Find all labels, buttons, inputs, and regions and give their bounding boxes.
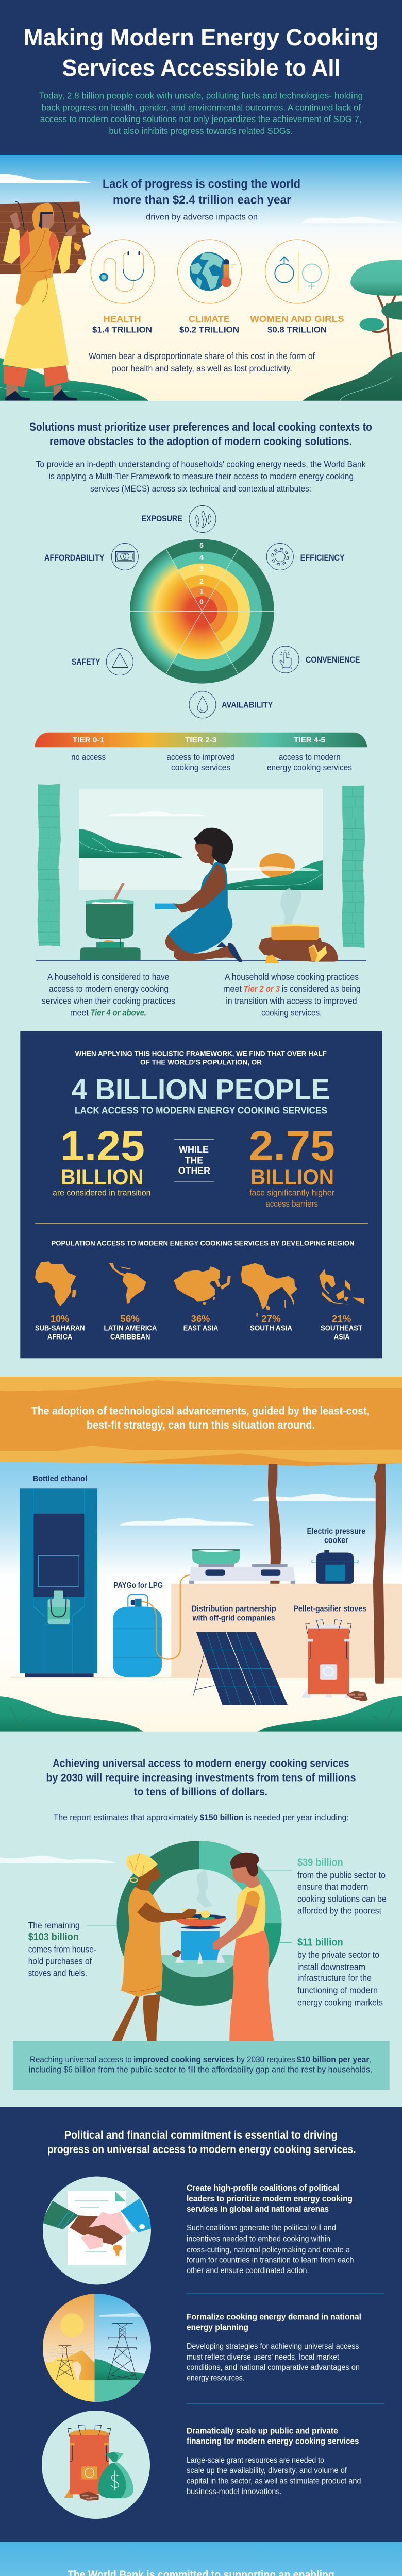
- text: coalitions: incentives needed to embed cooking within: [187, 2234, 330, 2243]
- connector lines: [261, 1870, 292, 1871]
- headline number: LACK ACCESS TO MODERN ENERGY COOKING SERVICES: [75, 1105, 327, 1116]
- text: tier 4 definition: services when their cooking practices: [42, 995, 175, 1006]
- tier scale bar: [35, 733, 367, 747]
- text: report estimate: is needed per year including:: [246, 1812, 349, 1822]
- title: Services Accessible to All: [62, 55, 341, 81]
- text: energy planning: Formalize cooking energy demand in national: [187, 2312, 361, 2321]
- text: report estimate: $150 billion: [200, 1812, 244, 1822]
- text: coalitions: cross-cutting, national policymaking and create a: [187, 2246, 350, 2255]
- tier numbers: 1: [199, 587, 204, 596]
- heading: by 2030 will require increasing investments from tens of millions: [46, 1771, 356, 1784]
- map: East Asia: [174, 1266, 231, 1305]
- heading: more than $2.4 trillion each year: [113, 193, 291, 206]
- illustration: pellet gasifier stove: [301, 1620, 368, 1701]
- heading: progress on universal access to modern energy cooking services.: [47, 2143, 356, 2156]
- text: coalitions: Such coalitions generate the political will and: [187, 2224, 336, 2232]
- tier numbers: 5: [199, 541, 204, 549]
- region stats: 36%: [191, 1314, 210, 1324]
- left woman: [112, 1994, 160, 2041]
- tier descriptions: access to modern: [279, 752, 341, 762]
- text: coalitions: services in global and national arenas: [187, 2205, 329, 2214]
- callout: $11 billion private: infrastructure for the: [297, 1973, 372, 1983]
- while the other: [174, 1139, 214, 1181]
- tier numbers: 4: [199, 553, 204, 562]
- text: report estimate: The report estimates that approximately: [54, 1812, 198, 1822]
- callout: $11 billion private: functioning of modern: [297, 1985, 378, 1995]
- cloud: [0, 1856, 116, 1863]
- text: scale up financing: capital in the sector, as well as stimulate product and: [187, 2477, 361, 2485]
- stat: 1.25 billion: 1.25: [60, 1123, 145, 1170]
- panel: cost of inaction: [0, 155, 402, 401]
- text: energy planning: [187, 2312, 361, 2382]
- heading: [103, 177, 300, 206]
- text: report estimate: [54, 1812, 349, 1822]
- intro caps: OF THE WORLD’S POPULATION, OR: [140, 1058, 262, 1066]
- intro text: is applying a Multi-Tier Framework to measure their access to modern energy cooking: [48, 471, 354, 481]
- text: tier 4 definition: access to modern energy cooking: [49, 984, 169, 994]
- icon: gender symbols: [265, 240, 329, 303]
- icon: stethoscope: [91, 240, 155, 303]
- text: tier 4 definition: Tier 4 or above.: [91, 1007, 146, 1018]
- region stats: 21%: [332, 1314, 351, 1324]
- panel: investment needs: [0, 1757, 390, 2090]
- text: tier 4 definition: A household is considered to have: [47, 972, 169, 982]
- stat: 2.75 billion: access barriers: [265, 1199, 318, 1209]
- banner: improved cooking: [13, 2041, 390, 2090]
- attribute: exposure: [142, 506, 216, 533]
- stat: 1.25 billion: BILLION: [60, 1165, 144, 1190]
- callout: $11 billion private: energy cooking markets: [297, 1997, 383, 2007]
- intro text: but also inhibits progress towards related SDGs.: [109, 126, 293, 136]
- tier descriptions: access to improved: [166, 752, 235, 762]
- heading: [46, 1757, 356, 1798]
- intro text: services (MECS) across six technical and contextual attributes:: [90, 484, 311, 494]
- region names: LATIN AMERICA: [104, 1325, 157, 1333]
- tree: [350, 260, 402, 358]
- attribute: exposure: EXPOSURE: [142, 514, 182, 523]
- tier descriptions: energy cooking services: [267, 762, 352, 772]
- while the other: OTHER: [178, 1165, 210, 1177]
- intro caps: [75, 1049, 327, 1066]
- region names: CARIBBEAN: [110, 1333, 150, 1342]
- icon: stove and money bag: [42, 2411, 150, 2519]
- panel: technology options: [0, 1377, 402, 1732]
- callout: $103 billion households: $103 billion: [28, 1931, 79, 1943]
- technology labels: Bottled ethanol: [33, 1475, 87, 1483]
- intro caps: WHEN APPLYING THIS HOLISTIC FRAMEWORK, WE FIND THAT OVER HALF: [75, 1049, 327, 1057]
- headline number: 4 BILLION PEOPLE: [72, 1073, 330, 1106]
- stat: 1.25 billion: are considered in transition: [53, 1188, 150, 1198]
- text: women bear cost: Women bear a disproportionate share of this cost in the form of: [89, 351, 315, 361]
- bowl: [174, 1916, 227, 1926]
- callout: $103 billion households: [28, 1920, 96, 1978]
- callout: $39 billion public: cooking solutions can be: [297, 1893, 387, 1904]
- text: tier 2-3 definition: Tier 2 or 3: [244, 984, 280, 994]
- tier descriptions: no access: [71, 752, 106, 762]
- banner: improved cooking: improved cooking services: [133, 2055, 234, 2064]
- heading: best-fit strategy, can turn this situation around.: [87, 1419, 315, 1431]
- intro text: To provide an in-depth understanding of households' cooking energy needs, the World Bank: [36, 460, 366, 469]
- callout: $39 billion public: afforded by the poorest: [297, 1906, 381, 1916]
- callout: $103 billion households: comes from house-: [28, 1944, 96, 1954]
- attribute: safety: [72, 648, 133, 675]
- woman cooking: [155, 904, 177, 909]
- region stats: [51, 1314, 351, 1324]
- region names: SUB-SAHARAN: [35, 1325, 85, 1333]
- illustration: bottled ethanol dispenser: [20, 1488, 97, 1677]
- heading: [31, 1405, 370, 1431]
- hills: [0, 352, 402, 401]
- tier descriptions: cooking services: [171, 762, 230, 772]
- heading: The adoption of technological advancements, guided by the least-cost,: [31, 1405, 370, 1417]
- callout: $39 billion public: ensure that modern: [297, 1882, 368, 1892]
- callout: $11 billion private: [297, 1937, 383, 2007]
- callout: $11 billion private: $11 billion: [297, 1937, 343, 1948]
- text: coalitions: forum for countries in transition to learn from each: [187, 2256, 354, 2265]
- attribute: safety: SAFETY: [72, 657, 100, 667]
- cost labels: $1.4 TRILLION: [92, 325, 152, 334]
- text: energy planning: must reflect diverse users’ needs, local market: [187, 2353, 339, 2362]
- cost labels: $0.8 TRILLION: [267, 325, 327, 334]
- banner: improved cooking: $10 billion per year: [297, 2055, 370, 2064]
- technology labels: with off-grid companies: [192, 1614, 275, 1622]
- stat: 2.75 billion: [249, 1123, 335, 1209]
- text: tier 2-3 definition: cooking services.: [261, 1007, 322, 1018]
- illustration: two-burner stove: [189, 1549, 295, 1584]
- text: scale up financing: scale up the availability, diversity, and volume of: [187, 2466, 347, 2475]
- callout: $103 billion households: hold purchases of: [28, 1956, 92, 1966]
- map: South Asia: [241, 1263, 297, 1317]
- clouds: [0, 174, 402, 223]
- region names: EAST ASIA: [183, 1325, 219, 1333]
- regional heading: POPULATION ACCESS TO MODERN ENERGY COOKING SERVICES BY DEVELOPING REGION: [52, 1239, 355, 1247]
- cost labels: HEALTH: [103, 314, 141, 324]
- right woman: [229, 1930, 274, 2041]
- cost labels: $0.2 TRILLION: [179, 325, 239, 334]
- attribute: convenience: CONVENIENCE: [306, 655, 360, 665]
- radar chart: [130, 539, 274, 684]
- tier numbers: [199, 541, 204, 606]
- intro text: [39, 90, 363, 136]
- panel: title header: [0, 0, 402, 155]
- text: tier 2-3 definition: in transition with access to improved: [226, 995, 357, 1006]
- text: energy planning: conditions, and national comparative advantages on: [187, 2363, 360, 2372]
- text: scale up financing: [187, 2427, 361, 2496]
- banner: improved cooking: ,: [370, 2055, 372, 2064]
- callout: $103 billion households: The remaining: [28, 1920, 80, 1930]
- counter: [171, 1584, 402, 1677]
- text: energy planning: energy resources.: [187, 2374, 245, 2382]
- heading: remove obstacles to the adoption of modern cooking solutions.: [49, 435, 352, 448]
- right tower: [108, 2323, 137, 2380]
- heading: [47, 2129, 356, 2156]
- technology labels: cooker: [324, 1536, 348, 1545]
- attribute: availability: [189, 691, 273, 718]
- tree trunk: [373, 1464, 386, 1684]
- illustration: two women cooking: [112, 1853, 274, 2041]
- banner: improved cooking: including $6 billion from the public sector to fill the affordability gap and the rest by households.: [29, 2065, 372, 2074]
- illustration: electric pressure cooker: [312, 1550, 358, 1584]
- investment ring chart: [87, 1841, 292, 2006]
- heading: [29, 420, 372, 448]
- stat: 2.75 billion: face significantly higher: [249, 1188, 334, 1198]
- attribute: availability: AVAILABILITY: [222, 700, 273, 709]
- text: tier 4 definition: [42, 972, 175, 1018]
- subheading: driven by adverse impacts on: [146, 212, 258, 222]
- hills: [0, 1696, 143, 1732]
- icon: warming globe: [177, 240, 241, 303]
- text: women bear cost: [89, 351, 315, 374]
- heading: Political and financial commitment is essential to driving: [64, 2129, 338, 2141]
- while the other: WHILE: [179, 1144, 209, 1156]
- callout: $39 billion public: $39 billion: [297, 1857, 343, 1868]
- floor: [36, 960, 366, 961]
- text: coalitions: [187, 2183, 354, 2275]
- text: coalitions: other and ensure coordinated action.: [187, 2266, 309, 2275]
- region names: SOUTH ASIA: [250, 1325, 292, 1333]
- intro text: [36, 460, 366, 494]
- technology labels: Distribution partnership: [192, 1604, 276, 1614]
- tree trunk: [268, 1464, 281, 1584]
- heading: Achieving universal access to modern energy cooking services: [53, 1757, 349, 1770]
- stat: 2.75 billion: 2.75: [249, 1123, 335, 1170]
- cost labels: [92, 314, 344, 334]
- icon: handshake on document: [41, 2176, 154, 2284]
- intro text: access to modern cooking solutions not only jeopardizes the achievement of SDG 7,: [40, 114, 362, 124]
- map: Southeast Asia: [319, 1269, 364, 1305]
- attribute: affordability: AFFORDABILITY: [44, 553, 104, 563]
- heading: to tens of billions of dollars.: [134, 1786, 267, 1798]
- tier numbers: 2: [199, 577, 204, 585]
- text: energy planning: Developing strategies for achieving universal access: [187, 2342, 359, 2351]
- left tower: [56, 2345, 74, 2380]
- title: [24, 24, 379, 81]
- map: Latin America: [109, 1263, 146, 1304]
- heading: Lack of progress is costing the world: [103, 177, 300, 191]
- attribute: efficiency: [266, 543, 345, 570]
- region names: AFRICA: [47, 1333, 73, 1342]
- tier scale bar: TIER 2-3: [185, 736, 216, 744]
- callout: $103 billion households: stoves and fuels.: [28, 1968, 87, 1978]
- panel: political and financial commitment: [0, 2107, 402, 2542]
- tier scale bar: TIER 4-5: [294, 736, 325, 744]
- text: energy planning: energy planning: [187, 2323, 248, 2332]
- region names: SOUTHEAST: [321, 1325, 362, 1333]
- tier numbers: 0: [199, 598, 204, 606]
- illustration: solar panel: [194, 1632, 288, 1705]
- callout: $11 billion private: by the private sector to: [297, 1950, 379, 1960]
- attribute: affordability: [44, 543, 138, 570]
- cost labels: WOMEN AND GIRLS: [250, 314, 344, 324]
- tier descriptions: [71, 752, 352, 772]
- intro text: Today, 2.8 billion people cook with unsafe, polluting fuels and technologies- holding: [39, 90, 363, 100]
- text: tier 4 definition: meet: [70, 1007, 89, 1018]
- text: tier 2-3 definition: A household whose cooking practices: [225, 972, 359, 982]
- callout: $39 billion public: [297, 1857, 387, 1916]
- stat: 1.25 billion: [53, 1123, 150, 1198]
- tier numbers: 3: [199, 565, 204, 573]
- clouds: [252, 1494, 376, 1501]
- stat: 2.75 billion: BILLION: [250, 1165, 334, 1190]
- region stats: 10%: [51, 1314, 69, 1324]
- icon: energy towers: [41, 2293, 156, 2404]
- attribute: efficiency: EFFICIENCY: [300, 553, 345, 563]
- panel: World Bank commitment: [0, 2542, 402, 2576]
- region names: ASIA: [334, 1333, 350, 1342]
- while the other: THE: [185, 1155, 203, 1166]
- stove: [175, 1950, 184, 1963]
- region stats: 56%: [120, 1314, 140, 1324]
- region maps: [35, 1261, 364, 1317]
- cost labels: CLIMATE: [189, 314, 230, 324]
- orange mountains header: [0, 1377, 402, 1466]
- banner: improved cooking: by 2030 requires: [237, 2055, 295, 2064]
- text: tier 2-3 definition: is considered as being: [282, 984, 361, 994]
- text: scale up financing: Dramatically scale up public and private: [187, 2427, 338, 2436]
- illustration: kitchen scene: [36, 784, 366, 963]
- technology labels: Electric pressure: [307, 1527, 365, 1536]
- text: tier 2-3 definition: [223, 972, 361, 1018]
- callout: $39 billion public: from the public sector to: [297, 1870, 386, 1880]
- intro text: back progress on health, gender, and environmental outcomes. A continued lack of: [42, 102, 361, 112]
- text: scale up financing: Large-scale grant resources are needed to: [187, 2456, 324, 2465]
- panel: multi-tier framework: [29, 420, 372, 1018]
- banner: improved cooking: Reaching universal access to: [30, 2055, 132, 2064]
- technology labels: [33, 1475, 366, 1622]
- tier scale bar: TIER 0-1: [73, 736, 104, 744]
- text: coalitions: Create high-profile coalitions of political: [187, 2183, 339, 2193]
- map: Africa: [35, 1261, 76, 1306]
- wood fire and pot: [258, 937, 338, 962]
- panel: 4 billion people: [20, 1031, 382, 1358]
- technology labels: Pellet-gasifier stoves: [294, 1604, 366, 1614]
- callout: $11 billion private: install downstream: [297, 1962, 365, 1972]
- illustration: LPG cylinder: [113, 1575, 190, 1677]
- text: scale up financing: financing for modern energy cooking services: [187, 2437, 359, 2446]
- text: tier 2-3 definition: meet: [223, 984, 242, 994]
- technology labels: PAYGo for LPG: [113, 1581, 163, 1590]
- region names: [35, 1325, 362, 1342]
- illustration: woman carrying firewood: [0, 201, 91, 400]
- title: Making Modern Energy Cooking: [24, 24, 379, 50]
- steam: [280, 888, 301, 927]
- text: women bear cost: poor health and safety, as well as lost productivity.: [112, 363, 292, 374]
- text: coalitions: leaders to prioritize modern energy cooking: [187, 2194, 353, 2204]
- stove with pot: [80, 947, 141, 960]
- region stats: 27%: [261, 1314, 281, 1324]
- attribute: convenience: [272, 646, 360, 673]
- text: scale up financing: business-model innovations.: [187, 2487, 282, 2496]
